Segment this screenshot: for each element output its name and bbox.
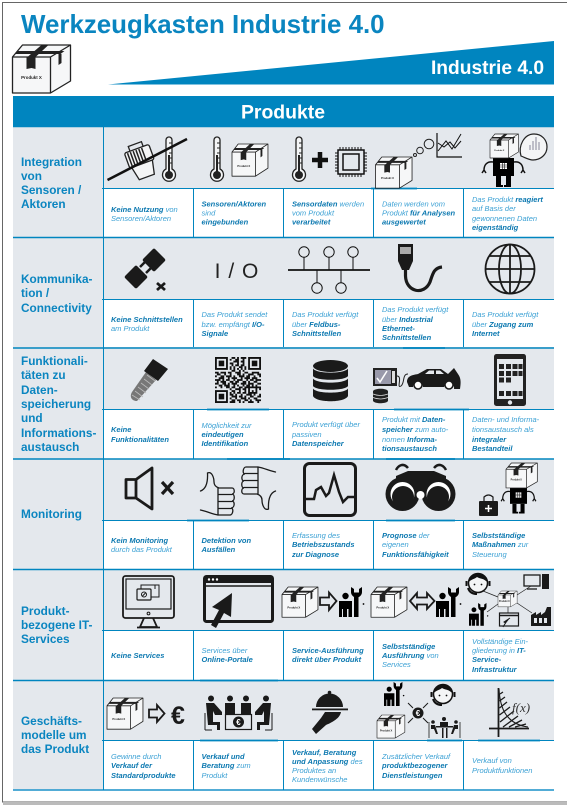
text: level 4: Ethernet- bbox=[382, 324, 415, 333]
text: level 4: der bbox=[417, 531, 430, 540]
text: level 5: tionsaustausch als bbox=[472, 425, 534, 434]
text: level 4: Funktionsfähigkeit bbox=[382, 550, 449, 559]
frame shadow bbox=[3, 802, 567, 805]
text: level 4: Schnittstellen bbox=[382, 333, 432, 342]
icon: robot with first-aid kit: Produkt X bbox=[511, 479, 522, 482]
icon: web portal with cursor bbox=[204, 576, 273, 628]
icon: sensor plus chip bbox=[292, 137, 367, 181]
text: level 5: Verkauf von bbox=[472, 756, 512, 765]
text: level 2: eingebunden bbox=[202, 218, 249, 226]
text: level 1: Keine Nutzung von bbox=[111, 205, 178, 214]
icon: screw bbox=[131, 359, 168, 401]
icon: IT service infrastructure: Produkt X bbox=[499, 600, 510, 603]
text: level 2: Identifikation bbox=[202, 439, 249, 448]
heading: Produkt- bbox=[21, 604, 70, 618]
text: level 5: auf Basis der bbox=[472, 204, 516, 213]
icon: box to euro bbox=[107, 698, 185, 730]
text: level 5: Produktfunktionen bbox=[472, 766, 532, 775]
heading: Daten- bbox=[21, 383, 58, 397]
icon: box thinking of chart: Produkt X bbox=[381, 176, 394, 180]
text: level 2: Das Produkt sendet bbox=[202, 310, 268, 319]
heading: modelle um bbox=[21, 728, 87, 742]
text: level 4: Das Produkt verfügt bbox=[382, 305, 449, 314]
text: level 5: über bbox=[472, 320, 489, 329]
text: level 2: Services über bbox=[202, 646, 248, 655]
text: level 4: von bbox=[424, 651, 439, 660]
text: level 4: Daten werden vom bbox=[382, 200, 445, 208]
text: level 4: Informa- bbox=[407, 435, 438, 444]
text: level 1: Kein Monitoring bbox=[111, 536, 168, 545]
text: level 5: integraler bbox=[472, 435, 507, 444]
text: level 5: Das Produkt bbox=[472, 195, 515, 204]
text: level 5: Maßnahmen bbox=[472, 540, 516, 549]
text: level 2: Ausfällen bbox=[200, 545, 236, 554]
text: level 5: Steuerung bbox=[472, 550, 507, 559]
text: level 4: über bbox=[382, 315, 399, 324]
heading: Informations- bbox=[21, 426, 96, 440]
text: level 3: passiven bbox=[291, 430, 322, 439]
text: level 4: Services bbox=[382, 660, 411, 669]
text: level 4: nomen bbox=[382, 435, 407, 444]
icon: bundled services: Produkt X bbox=[380, 728, 393, 732]
panel: Kommunikation / Connectivity bbox=[21, 244, 539, 342]
icon: binoculars bbox=[386, 465, 456, 511]
heading: täten zu bbox=[21, 368, 66, 382]
heading: und bbox=[21, 411, 43, 425]
text: level 2: bzw. empfängt bbox=[202, 320, 252, 329]
icon: serving cloche bbox=[312, 691, 348, 734]
text: level 4: Dienstleistungen bbox=[382, 771, 443, 780]
text: level 2: eindeutigen bbox=[202, 430, 244, 439]
text: level 1: Gewinne durch bbox=[111, 752, 161, 761]
text: level 2: Signale bbox=[202, 329, 228, 338]
icon: globe bbox=[486, 244, 534, 294]
text: level 4: produktbezogener bbox=[381, 761, 449, 770]
text: level 5: IT- bbox=[517, 646, 526, 655]
text: level 4: eigenen bbox=[382, 540, 409, 549]
heading: Monitoring bbox=[21, 507, 82, 521]
panel: Monitoring bbox=[21, 463, 537, 559]
icon: thumbs up and down bbox=[200, 467, 276, 515]
icon: box to euro: Produkt X bbox=[112, 717, 125, 721]
text: level 4: Prognose bbox=[382, 531, 417, 540]
icon: function graph: f(x) bbox=[512, 700, 530, 715]
panel: table background bbox=[13, 126, 554, 790]
icon: status monitor bbox=[304, 464, 356, 516]
text: level 2: I/O- bbox=[252, 320, 265, 329]
text: level 5: gliederung in bbox=[472, 646, 517, 655]
heading: bezogene IT- bbox=[21, 618, 93, 632]
icon: box to worker: Produkt X bbox=[287, 605, 300, 609]
heading: Sensoren / bbox=[21, 183, 82, 197]
text: level 5: Internet bbox=[472, 329, 500, 338]
text: level 2: Detektion von bbox=[202, 536, 252, 545]
heading: austausch bbox=[21, 440, 79, 454]
text: level 1: Keine Schnittstellen bbox=[111, 315, 183, 324]
heading: Funktionali- bbox=[21, 354, 88, 368]
icon: box thinking of chart bbox=[376, 133, 462, 188]
text: level 4: Ausführung bbox=[381, 651, 425, 660]
icon: crossed-out sensor bbox=[108, 137, 187, 181]
text: level 3: Produkt verfügt über bbox=[292, 420, 360, 429]
panel: Funktionalitäten bbox=[21, 354, 540, 454]
text: level 2: Sensoren/Aktoren bbox=[202, 200, 267, 208]
icon: box and worker exchange: Produkt X bbox=[376, 605, 389, 609]
heading: von bbox=[21, 169, 42, 183]
text: level 3: Das Produkt verfügt bbox=[292, 310, 359, 319]
text: level 3: verarbeitet bbox=[292, 218, 331, 226]
text: level 5: Zugang zum bbox=[488, 320, 534, 329]
text: level 1: Keine bbox=[111, 425, 131, 434]
text: level 3: über bbox=[292, 320, 309, 329]
text: level 4: Produkt mit bbox=[382, 415, 422, 424]
text: level 5: Vollständige Ein- bbox=[472, 637, 529, 646]
text: level 5: Das Produkt verfügt bbox=[472, 310, 539, 319]
icon: box to euro: € bbox=[171, 702, 185, 730]
text: level 3: Sensordaten bbox=[292, 200, 338, 208]
icon: robot with first-aid kit bbox=[479, 463, 537, 516]
icon: QR code bbox=[215, 358, 261, 402]
text: level 3: zur Diagnose bbox=[291, 550, 339, 559]
text: level 4: zum auto- bbox=[413, 425, 449, 434]
text: level 3: direkt über Produkt bbox=[292, 655, 362, 664]
icon: IT service infrastructure bbox=[466, 573, 551, 627]
heading: Aktoren bbox=[21, 197, 66, 211]
icon: robot with speech bubble bbox=[482, 134, 547, 187]
icon: robot with speech bubble: Produkt X bbox=[494, 149, 505, 152]
text: level 4: Industrial bbox=[399, 315, 434, 324]
text: level 4: Zusätzlicher Verkauf bbox=[381, 752, 451, 761]
text: level 4: speicher bbox=[382, 425, 414, 434]
text: level 1: Standardprodukte bbox=[111, 771, 176, 780]
icon: unplugged connector bbox=[124, 248, 166, 290]
text: level 3: des bbox=[348, 757, 363, 766]
icon: function graph bbox=[489, 688, 530, 737]
text: level 4: ausgewertet bbox=[382, 218, 426, 226]
text: level 2: Produkt bbox=[202, 771, 228, 780]
text: level 4: tionsaustausch bbox=[382, 444, 437, 453]
text: level 5: Infrastruktur bbox=[472, 665, 518, 674]
text: level 2: Beratung bbox=[202, 761, 235, 770]
text: level 4: Daten- bbox=[422, 415, 446, 424]
text: level 5: Bestandteil bbox=[472, 444, 513, 453]
icon: product box: Produkt X bbox=[21, 75, 42, 80]
text: level 3: Produktes an bbox=[292, 766, 336, 775]
icon: sensor and box bbox=[210, 137, 268, 181]
text: level 5: reagiert bbox=[515, 195, 543, 204]
text: level 3: Verkauf, Beratung bbox=[292, 748, 357, 757]
banner: Industrie 4.0 wedge: Industrie 4.0 bbox=[431, 58, 544, 79]
text: level 2: sind bbox=[202, 208, 216, 218]
icon: product box bbox=[12, 45, 70, 93]
heading: speicherung bbox=[21, 397, 91, 411]
icon: bundled services: € bbox=[416, 709, 421, 718]
panel: Geschäftsmodelle bbox=[21, 682, 532, 784]
text: level 1: Funktionalitäten bbox=[111, 435, 169, 444]
text: level 3: vom Produkt bbox=[292, 208, 335, 218]
icon: muted speaker bbox=[126, 468, 173, 509]
text: level 5: Service- bbox=[472, 655, 502, 664]
icon: database bbox=[313, 360, 348, 401]
icon: I / O: I / O bbox=[215, 260, 259, 283]
heading: Connectivity bbox=[21, 301, 92, 315]
text: level 4: Produkt bbox=[382, 208, 410, 218]
heading: Integration bbox=[21, 155, 82, 169]
text: level 1: am Produkt bbox=[111, 324, 150, 333]
text: level 3: Feldbus- bbox=[309, 320, 341, 329]
panel: Produktbezogene IT-Services bbox=[21, 573, 551, 674]
text: level 5: Selbstständige bbox=[472, 531, 525, 540]
text: level 4: für Analysen bbox=[410, 208, 456, 218]
text: level 3: Service-Ausführung bbox=[292, 646, 364, 655]
banner: Industrie 4.0 wedge bbox=[108, 41, 554, 84]
icon: sales meeting: € bbox=[236, 718, 241, 727]
icon: tablet bbox=[494, 354, 526, 406]
text: level 5: gewonnenen Daten bbox=[472, 214, 537, 223]
icon: bundled services bbox=[377, 682, 460, 738]
panel: Integration von Sensoren / Aktoren bbox=[21, 133, 547, 232]
text: level 4: Selbstständige bbox=[382, 642, 435, 651]
icon: sales meeting bbox=[205, 696, 272, 730]
text: level 2: zum bbox=[234, 761, 251, 770]
heading: Geschäfts- bbox=[21, 714, 82, 728]
text: level 5: zur bbox=[516, 540, 529, 549]
text: level 1: Verkauf der bbox=[111, 761, 153, 770]
text: level 3: Datenspeicher bbox=[292, 439, 345, 448]
heading: tion / bbox=[21, 286, 50, 300]
title: Werkzeugkasten Industrie 4.0 bbox=[21, 11, 385, 39]
text: level 3: werden bbox=[340, 200, 364, 208]
text: level 2: Verkauf und bbox=[202, 752, 245, 761]
heading: Kommunika- bbox=[21, 272, 93, 286]
heading: das Produkt bbox=[21, 742, 89, 756]
text: level 5: Daten- und Informa- bbox=[472, 415, 540, 424]
heading: Services bbox=[21, 632, 70, 646]
text: level 1: durch das Produkt bbox=[111, 545, 173, 554]
text: level 3: Kundenwünsche bbox=[292, 775, 347, 784]
text: level 3: Schnittstellen bbox=[292, 329, 342, 338]
text: level 3: Erfassung des bbox=[292, 531, 340, 540]
icon: field bus bbox=[288, 247, 370, 293]
icon: desktop monitor bbox=[123, 576, 174, 628]
text: level 2: Online-Portale bbox=[202, 655, 253, 664]
icon: ethernet cable bbox=[398, 244, 442, 291]
icon: box and worker exchange bbox=[371, 587, 461, 617]
text: level 1: Keine Services bbox=[111, 651, 164, 660]
text: level 1: Sensoren/Aktoren bbox=[111, 214, 171, 223]
header bar: Produkte bbox=[13, 96, 554, 127]
text: level 2: Möglichkeit zur bbox=[202, 421, 252, 430]
header bar: Produkte: Produkte bbox=[241, 102, 325, 124]
text: level 3: und Anpassung bbox=[292, 757, 349, 766]
icon: monitor, storage and car bbox=[373, 368, 461, 403]
icon: sensor and box: Produkt X bbox=[237, 164, 250, 168]
text: level 5: eigenständig bbox=[472, 223, 519, 232]
icon: box to worker bbox=[282, 587, 364, 617]
text: level 3: Betriebszustands bbox=[292, 540, 355, 549]
